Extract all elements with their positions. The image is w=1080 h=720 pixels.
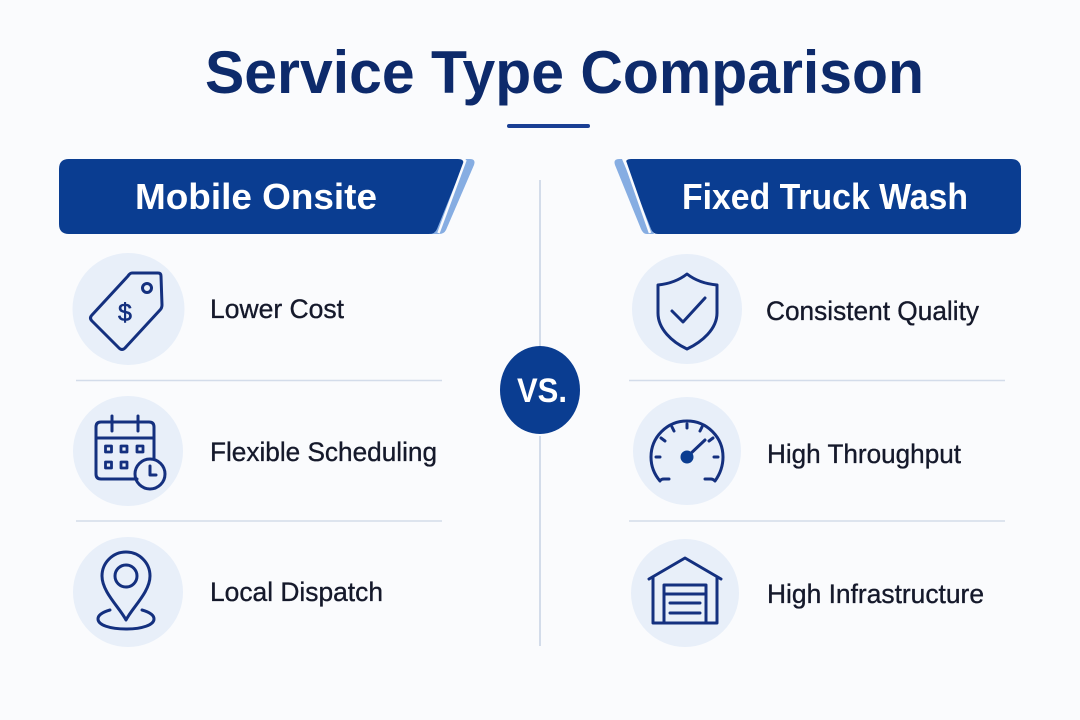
icon: speedometer <box>651 421 723 481</box>
icon: calendar with clock <box>96 416 165 489</box>
item: High Throughput <box>633 397 961 505</box>
center divider <box>539 180 541 646</box>
banner: Mobile Onsite <box>59 159 474 234</box>
title: Service Type Comparison <box>205 39 924 106</box>
icon: shield with check <box>658 274 717 349</box>
banner: Mobile Onsite: Mobile Onsite <box>135 176 377 217</box>
item: High Infrastructure: High Infrastructure <box>767 579 984 609</box>
versus badge <box>500 346 580 434</box>
banner: Fixed Truck Wash <box>614 159 1021 234</box>
item: Flexible Scheduling: Flexible Scheduling <box>210 437 437 467</box>
item: Lower Cost <box>72 253 344 365</box>
panel: Fixed Truck Wash <box>614 159 1021 647</box>
panel: Mobile Onsite <box>59 159 474 647</box>
item: Flexible Scheduling <box>73 396 437 506</box>
item: Local Dispatch: Local Dispatch <box>210 577 383 607</box>
item: Lower Cost: Lower Cost <box>210 294 344 324</box>
item: Consistent Quality <box>632 254 979 364</box>
item: Local Dispatch <box>73 537 383 647</box>
versus badge: VS. <box>517 372 567 410</box>
icon: price tag: $ <box>118 299 132 327</box>
title underline <box>507 124 590 128</box>
icon: location pin <box>98 552 154 629</box>
banner: Fixed Truck Wash: Fixed Truck Wash <box>682 176 968 217</box>
icon: garage <box>649 558 721 623</box>
icon: price tag <box>90 273 162 350</box>
item: High Infrastructure <box>631 539 984 647</box>
item: High Throughput: High Throughput <box>767 439 961 469</box>
item: Consistent Quality: Consistent Quality <box>766 296 979 326</box>
